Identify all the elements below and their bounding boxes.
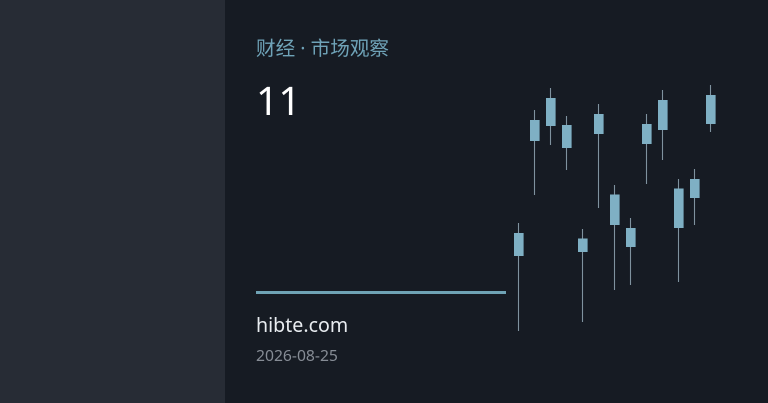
- panel: left sidebar: [0, 0, 225, 403]
- accent rule: [256, 291, 506, 294]
- title number: 11: [256, 74, 301, 127]
- site name: hibte.com: [256, 311, 348, 338]
- category heading: 财经 · 市场观察: [256, 34, 389, 61]
- publication date: 2026-08-25: [256, 344, 338, 366]
